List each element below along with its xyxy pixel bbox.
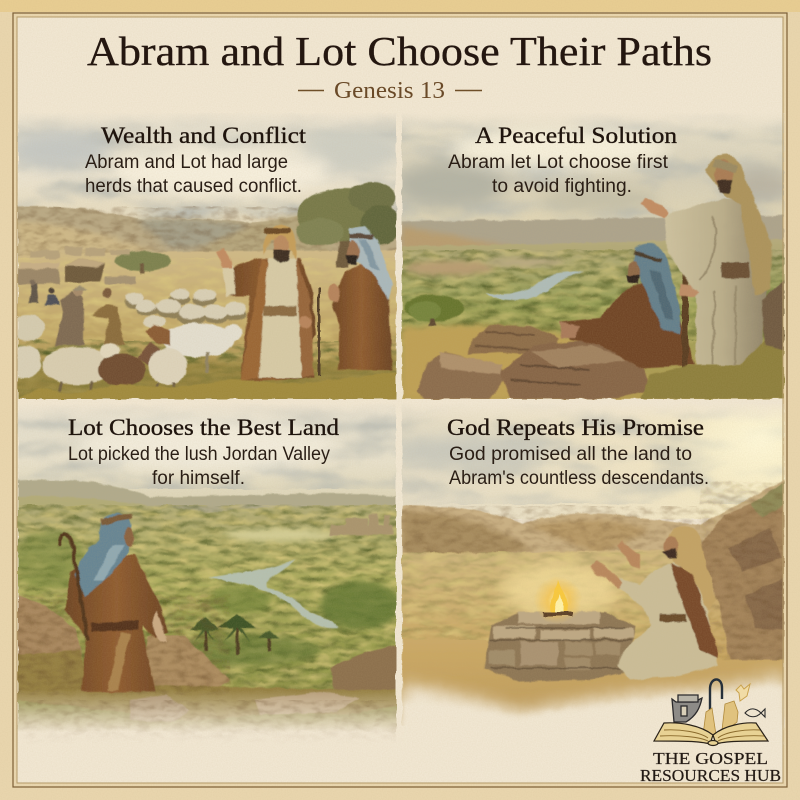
- small tree: [115, 251, 171, 273]
- logo wordmark: THE GOSPEL: [653, 749, 768, 768]
- tree: [404, 295, 464, 326]
- subtitle: Genesis 13: [334, 78, 445, 104]
- icon: shepherd crook: [710, 679, 722, 735]
- shepherds: [29, 279, 124, 348]
- rocks: [417, 325, 650, 399]
- palms: [190, 614, 280, 654]
- text: god repeats his promise: God Repeats His Promise: [447, 415, 704, 440]
- bottom fade: [17, 690, 397, 732]
- text: wealth and conflict: [85, 123, 307, 197]
- foreground brush: [640, 320, 784, 399]
- ground fade: [402, 672, 784, 760]
- text: a peaceful solution: to avoid fighting.: [492, 176, 632, 197]
- flock: [125, 288, 247, 328]
- cliffs: [700, 482, 784, 660]
- rocks: [17, 595, 397, 722]
- text: god repeats his promise: God promised all the land to: [449, 444, 692, 465]
- icon: dove: [736, 684, 750, 701]
- logo: the gospel resources hub: [640, 679, 781, 785]
- text: a peaceful solution: [448, 123, 678, 197]
- figure: Abram: [216, 224, 316, 382]
- fire: [536, 578, 580, 621]
- logo wordmark: [640, 749, 781, 785]
- text: lot chooses the best land: for himself.: [152, 468, 245, 489]
- icon: fish: [745, 709, 765, 717]
- text: wealth and conflict: herds that caused conflict.: [85, 176, 302, 197]
- text: god repeats his promise: [447, 415, 709, 489]
- river: [208, 559, 338, 628]
- figure: Lot seated: [560, 243, 695, 368]
- panel: a peaceful solution: [395, 113, 790, 399]
- text: lot chooses the best land: [68, 415, 340, 489]
- text: a peaceful solution: Abram let Lot choose first: [448, 152, 669, 173]
- city: [330, 514, 393, 535]
- panel: lot chooses the best land: [15, 404, 400, 747]
- panel: wealth and conflict: [9, 113, 400, 399]
- staff: [318, 288, 320, 376]
- river: [485, 271, 584, 300]
- title: Abram and Lot Choose Their Paths: [87, 28, 712, 74]
- text: god repeats his promise: Abram's countless descendants.: [449, 468, 709, 489]
- figure: Lot from behind: [60, 514, 168, 692]
- text: a peaceful solution: A Peaceful Solution: [475, 123, 678, 148]
- figure: Abram kneeling: [591, 526, 718, 680]
- icon: ark: [672, 695, 702, 722]
- village: [18, 247, 135, 284]
- figure: Abram standing: [641, 154, 772, 372]
- figure: Lot: [328, 226, 392, 370]
- logo wordmark: RESOURCES HUB: [640, 766, 781, 785]
- text: lot chooses the best land: Lot picked the lush Jordan Valley: [68, 444, 330, 465]
- text: lot chooses the best land: Lot Chooses the Best Land: [68, 415, 340, 440]
- text: wealth and conflict: Wealth and Conflict: [101, 123, 307, 148]
- tree: [296, 182, 400, 268]
- altar: [484, 612, 636, 682]
- grass: [17, 372, 396, 399]
- goat and sheep foreground: [9, 315, 243, 394]
- panel: god repeats his promise: [401, 404, 785, 744]
- staff: [682, 252, 688, 377]
- icon: praying hands: [703, 701, 738, 735]
- text: wealth and conflict: Abram and Lot had large: [85, 152, 288, 173]
- icon: open book: [654, 723, 768, 746]
